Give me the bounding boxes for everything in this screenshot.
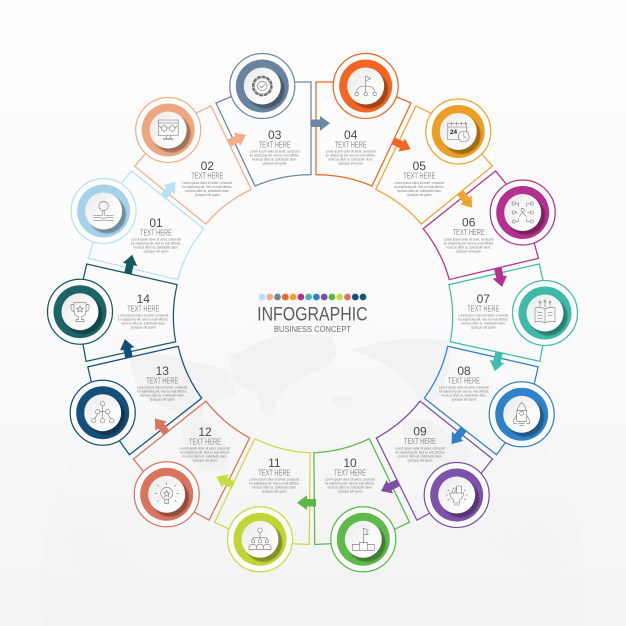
text 07: TEXT HERE bbox=[467, 304, 499, 313]
badge 06 bbox=[490, 180, 555, 245]
text 13: tur adipiscing elit. Sed eu erat efficitur, bbox=[137, 390, 187, 394]
text 14: 14 bbox=[137, 292, 150, 306]
arrow 07 to 08 bbox=[488, 351, 506, 373]
text 14: tur adipiscing elit. Sed eu erat efficitur, bbox=[118, 318, 168, 322]
panel 10 bbox=[279, 429, 409, 572]
badge 14 bbox=[48, 279, 112, 344]
outline 10 bbox=[279, 429, 409, 563]
text 09: Quisque elit quam bbox=[408, 458, 433, 462]
badge 11 bbox=[228, 507, 292, 572]
icon: monitor with glasses bbox=[158, 120, 178, 140]
text 08: Lorem ipsum dolor sit amet, consectet bbox=[439, 386, 489, 390]
badge 03 bbox=[230, 54, 295, 118]
text 04: rhoncus diam at, sollicitudin diam. bbox=[328, 158, 373, 162]
text 08: Quisque elit quam bbox=[452, 398, 477, 402]
badge 02 bbox=[136, 98, 201, 162]
outline 01 bbox=[72, 171, 213, 310]
text 11: 11 bbox=[268, 456, 281, 470]
icon: magnifier over book bbox=[94, 201, 114, 220]
icon: org chart with people bbox=[249, 528, 271, 549]
text 03: tur adipiscing elit. Sed eu erat efficitur, bbox=[250, 154, 300, 158]
text 01: tur adipiscing elit. Sed eu erat efficitur, bbox=[131, 242, 181, 246]
panel 01 bbox=[71, 171, 213, 310]
text 09: TEXT HERE bbox=[404, 437, 436, 446]
outline 12 bbox=[133, 394, 274, 533]
text 06: rhoncus diam at, sollicitudin diam. bbox=[446, 245, 491, 249]
text 13: TEXT HERE bbox=[146, 376, 178, 385]
text 04: Lorem ipsum dolor sit amet, consectet bbox=[326, 150, 376, 154]
globe and world map bbox=[41, 315, 585, 626]
text 13: rhoncus diam at, sollicitudin diam. bbox=[140, 394, 185, 398]
text 09: 09 bbox=[413, 424, 427, 438]
arrow 05 to 06 bbox=[454, 188, 478, 212]
panel 11 bbox=[215, 429, 345, 572]
panel 07 bbox=[438, 264, 578, 380]
text 11: tur adipiscing elit. Sed eu erat efficitur, bbox=[249, 482, 299, 486]
text 04 bbox=[326, 128, 376, 166]
text 04: 04 bbox=[344, 128, 358, 142]
text 08: tur adipiscing elit. Sed eu erat efficitur, bbox=[439, 390, 489, 394]
colour dots bbox=[259, 294, 366, 300]
text 09: rhoncus diam at, sollicitudin diam. bbox=[398, 454, 443, 458]
text 03: TEXT HERE bbox=[259, 140, 291, 149]
arrow 11 to 12 bbox=[213, 470, 237, 492]
title: INFOGRAPHIC bbox=[257, 304, 368, 326]
text 05: TEXT HERE bbox=[403, 172, 435, 181]
text 08: 08 bbox=[457, 364, 471, 378]
text 05: Quisque elit quam bbox=[407, 193, 432, 197]
text 14: Quisque elit quam bbox=[131, 326, 156, 330]
text 01: TEXT HERE bbox=[140, 228, 172, 237]
text 11: TEXT HERE bbox=[258, 468, 290, 477]
panel 14 bbox=[48, 264, 188, 380]
text 07: 07 bbox=[477, 292, 490, 306]
panel 06 bbox=[414, 171, 555, 310]
icon: hierarchy bbox=[92, 402, 114, 423]
badge 08 bbox=[489, 382, 554, 447]
icon: bulb with shapes bbox=[446, 486, 468, 505]
text 06: TEXT HERE bbox=[453, 228, 485, 237]
text 08: TEXT HERE bbox=[448, 376, 480, 385]
text 11: Lorem ipsum dolor sit amet, consectet bbox=[249, 478, 299, 482]
arrow 09 to 10 bbox=[378, 476, 401, 498]
text 05: tur adipiscing elit. Sed eu erat efficitur, bbox=[394, 185, 444, 189]
text 10 bbox=[325, 456, 375, 494]
arrow 13 to 14 bbox=[118, 337, 136, 359]
text 10: TEXT HERE bbox=[334, 468, 366, 477]
text 01: Lorem ipsum dolor sit amet, consectet bbox=[131, 238, 181, 242]
panel 05 bbox=[371, 99, 502, 241]
arrow 01 to 02 bbox=[158, 177, 181, 201]
text 07: tur adipiscing elit. Sed eu erat efficitur, bbox=[458, 318, 508, 322]
text 01: 01 bbox=[149, 216, 163, 230]
panel 04 bbox=[316, 54, 411, 186]
icon: flag on podium bbox=[352, 528, 374, 550]
arrows between panels bbox=[118, 116, 509, 510]
outline 13 bbox=[88, 344, 210, 459]
subtitle: BUSINESS CONCEPT bbox=[274, 324, 352, 334]
text 12 bbox=[180, 425, 230, 463]
icon: calendar with clock bbox=[448, 122, 469, 142]
text 03: 03 bbox=[268, 128, 282, 142]
text 12: rhoncus diam at, sollicitudin diam. bbox=[182, 455, 228, 459]
badge 10 bbox=[331, 507, 396, 572]
badge 01 bbox=[71, 178, 136, 244]
text 12: TEXT HERE bbox=[189, 437, 221, 446]
text 13: 13 bbox=[156, 364, 169, 378]
text 13 bbox=[137, 364, 187, 402]
text 14: rhoncus diam at, sollicitudin diam. bbox=[121, 322, 166, 326]
text 14: Lorem ipsum dolor sit amet, consectet bbox=[118, 314, 168, 318]
text 03 bbox=[250, 128, 300, 166]
arrow 04 to 05 bbox=[390, 134, 414, 156]
text 04: TEXT HERE bbox=[335, 140, 367, 149]
text 14: TEXT HERE bbox=[127, 304, 159, 313]
panel 12 bbox=[133, 394, 274, 533]
outline 05 bbox=[371, 106, 502, 241]
text 09: tur adipiscing elit. Sed eu erat efficitur, bbox=[395, 450, 445, 454]
text 10: Quisque elit quam bbox=[338, 490, 363, 494]
outline 07 bbox=[438, 264, 560, 380]
panel 09 bbox=[352, 394, 493, 533]
text 05 bbox=[394, 159, 444, 197]
text 06: 06 bbox=[462, 216, 476, 230]
text 11: rhoncus diam at, sollicitudin diam. bbox=[252, 486, 297, 490]
text 08 bbox=[439, 364, 489, 402]
badge 09 bbox=[424, 462, 489, 528]
arrow 06 to 07 bbox=[491, 267, 509, 289]
badge 12 bbox=[134, 462, 199, 527]
arrow 08 to 09 bbox=[446, 425, 469, 449]
arrow 14 to 01 bbox=[121, 253, 139, 275]
central title block bbox=[257, 294, 368, 334]
outline 14 bbox=[66, 264, 188, 380]
text 12: 12 bbox=[198, 425, 212, 439]
icon: people network bbox=[512, 202, 533, 223]
badge 13 bbox=[70, 380, 135, 445]
text 01 bbox=[131, 216, 181, 254]
outline 02 bbox=[125, 106, 256, 241]
text 07: Quisque elit quam bbox=[471, 326, 496, 330]
text 11: Quisque elit quam bbox=[262, 490, 287, 494]
text 13: Lorem ipsum dolor sit amet, consectet bbox=[137, 386, 187, 390]
text 02: rhoncus diam at, sollicitudin diam. bbox=[185, 189, 230, 193]
text 11 bbox=[249, 456, 299, 494]
text 14 bbox=[118, 292, 168, 330]
icon: bulb with star bbox=[155, 482, 179, 503]
panel 03 bbox=[216, 54, 311, 186]
text 02: tur adipiscing elit. Sed eu erat efficitur, bbox=[182, 185, 232, 189]
text 02: 02 bbox=[201, 159, 214, 173]
text 12: Lorem ipsum dolor sit amet, consectet bbox=[180, 447, 230, 451]
badge 04 bbox=[333, 54, 398, 118]
outline 08 bbox=[416, 344, 538, 459]
panel 02 bbox=[125, 98, 256, 241]
text 04: tur adipiscing elit. Sed eu erat efficitur, bbox=[326, 154, 376, 158]
text 10: tur adipiscing elit. Sed eu erat efficitur, bbox=[325, 482, 375, 486]
text 06 bbox=[444, 216, 494, 253]
text 08: rhoncus diam at, sollicitudin diam. bbox=[442, 394, 487, 398]
panel 08 bbox=[416, 344, 554, 459]
text 02: Quisque elit quam bbox=[195, 193, 220, 197]
icon: rocket bbox=[514, 402, 530, 425]
text 10: rhoncus diam at, sollicitudin diam. bbox=[328, 486, 373, 490]
arrow 12 to 13 bbox=[149, 414, 173, 438]
text 10: 10 bbox=[343, 456, 357, 470]
text 02: TEXT HERE bbox=[191, 172, 223, 181]
text 07 bbox=[458, 292, 508, 330]
text 05: 05 bbox=[413, 159, 426, 173]
text 02: Lorem ipsum dolor sit amet, consectet bbox=[182, 181, 232, 185]
text 09: Lorem ipsum dolor sit amet, consectet bbox=[395, 446, 445, 450]
text 01: rhoncus diam at, sollicitudin diam. bbox=[134, 246, 179, 250]
arrow 10 to 11 bbox=[297, 495, 316, 510]
icon: flag on tree bbox=[355, 76, 376, 96]
arrow 02 to 03 bbox=[226, 128, 249, 150]
text 05: Lorem ipsum dolor sit amet, consectet bbox=[394, 181, 444, 185]
outline 09 bbox=[352, 394, 493, 533]
badge 05 bbox=[426, 99, 491, 164]
outline 04 bbox=[316, 82, 411, 186]
arrow 03 to 04 bbox=[311, 116, 330, 131]
outline 03 bbox=[216, 82, 311, 186]
text 07: rhoncus diam at, sollicitudin diam. bbox=[461, 322, 506, 326]
text 06: Lorem ipsum dolor sit amet, consectet bbox=[444, 237, 494, 241]
text 13: Quisque elit quam bbox=[150, 398, 175, 402]
icon: calendar with clock: 24 bbox=[450, 129, 457, 136]
text 03: Lorem ipsum dolor sit amet, consectet bbox=[250, 150, 300, 154]
icon: trophy with star bbox=[71, 303, 89, 322]
text 07: Lorem ipsum dolor sit amet, consectet bbox=[458, 314, 508, 318]
text 12: tur adipiscing elit. Sed eu erat efficitur, bbox=[180, 451, 230, 455]
badge 07 bbox=[512, 280, 578, 346]
icon: open book bbox=[535, 300, 555, 323]
text 05: rhoncus diam at, sollicitudin diam. bbox=[397, 189, 442, 193]
text 04: Quisque elit quam bbox=[338, 162, 363, 166]
text 06: Quisque elit quam bbox=[456, 249, 481, 253]
text 10: Lorem ipsum dolor sit amet, consectet bbox=[325, 478, 375, 482]
outline 11 bbox=[215, 429, 345, 563]
text 03: rhoncus diam at, sollicitudin diam. bbox=[252, 158, 297, 162]
text 03: Quisque elit quam bbox=[262, 162, 287, 166]
text 01: Quisque elit quam bbox=[144, 250, 169, 254]
outline 06 bbox=[414, 171, 555, 310]
panel 13 bbox=[70, 344, 210, 459]
text 02 bbox=[182, 159, 232, 197]
icon: gear with check bbox=[253, 77, 272, 95]
text 06: tur adipiscing elit. Sed eu erat efficitur, bbox=[444, 241, 494, 245]
text 09 bbox=[395, 424, 445, 462]
text 12: Quisque elit quam bbox=[192, 459, 218, 463]
